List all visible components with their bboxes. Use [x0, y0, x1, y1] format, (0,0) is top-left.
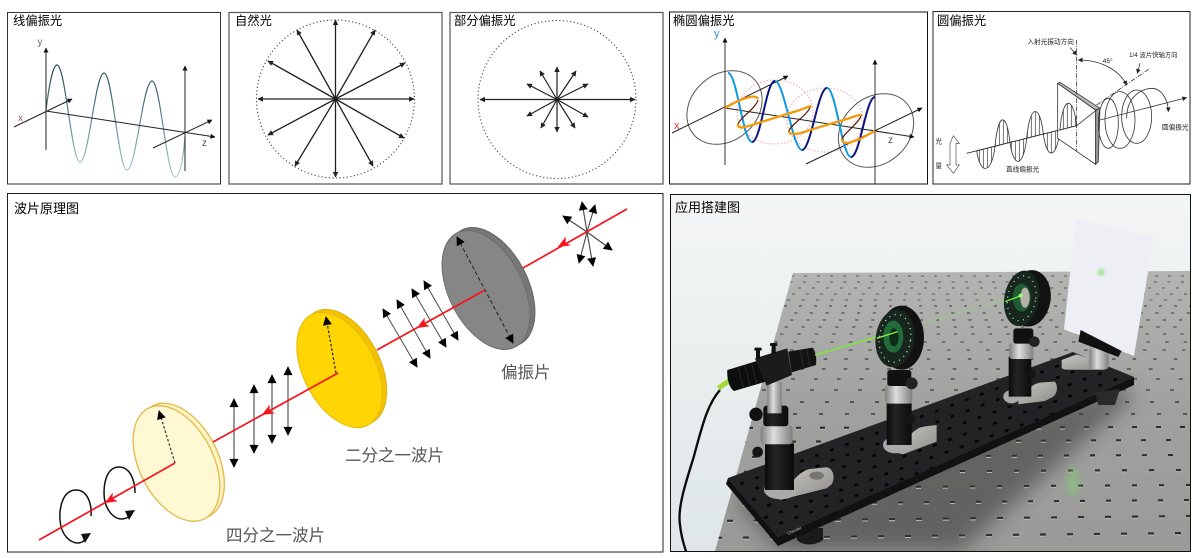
- optical table: [700, 271, 1190, 551]
- breadboard: [726, 352, 1136, 546]
- label: half-wave plate: 二分之一波片: [345, 446, 444, 465]
- lower table holes with soft rims: [700, 428, 1190, 538]
- polarizer mount 2: [1000, 267, 1057, 404]
- reflected green spot: [1066, 467, 1080, 497]
- title: partially polarized light: 部分偏振光: [454, 13, 516, 28]
- title: application setup: 应用搭建图: [675, 200, 740, 215]
- disc: quarter-wave plate: [115, 389, 242, 536]
- chart: sine wave with axes: y: [38, 37, 42, 48]
- chart: natural light vectors: [256, 20, 414, 178]
- polarizer mount 1: [872, 306, 937, 454]
- chart: quarter-wave plate schematic: 45°: [1103, 57, 1113, 65]
- chart: quarter-wave plate schematic: 1/4 波片快轴方向: [1129, 50, 1178, 59]
- label: polarizer: 偏振片: [501, 363, 550, 382]
- chart: elliptical helix: x: [674, 120, 680, 132]
- title: linear polarized light: 线偏振光: [13, 13, 62, 28]
- white screen and holder: [1062, 268, 1148, 405]
- chart: quarter-wave plate schematic: 入射光振动方向: [1027, 37, 1074, 46]
- chart: quarter-wave plate schematic: 圆偏振光: [1162, 122, 1189, 131]
- title: natural light: 自然光: [235, 13, 272, 28]
- incident unpolarized vectors: [563, 202, 612, 266]
- chart: quarter-wave plate schematic: [935, 37, 1189, 174]
- chart: quarter-wave plate schematic: 量: [935, 162, 942, 170]
- disc: half-wave plate: [279, 295, 404, 442]
- panel: partially polarized light: [450, 12, 663, 184]
- panel: elliptical polarized light: [670, 12, 929, 184]
- chart: sine wave with axes: z: [202, 138, 207, 149]
- linear vectors after polarizer: [383, 281, 458, 367]
- panel: natural light: [229, 12, 442, 184]
- disc: polarizer: [424, 213, 553, 364]
- chart: elliptical helix: y: [714, 28, 720, 40]
- chart: sine wave with axes: x: [18, 113, 23, 124]
- panel: linear polarized light: [8, 12, 220, 184]
- green laser beam: [814, 299, 1004, 356]
- circular polarization arrows: [60, 467, 135, 543]
- breadboard: Cheeder: [786, 525, 803, 536]
- title: waveplate principle: 波片原理图: [14, 201, 79, 216]
- chart: quarter-wave plate schematic: 光: [935, 137, 942, 146]
- panel: circular polarized light: [933, 12, 1190, 184]
- label: quarter-wave plate: 四分之一波片: [226, 526, 325, 545]
- title: elliptical polarized light: 椭圆偏振光: [673, 13, 734, 28]
- vertical vectors after half-wave plate: [234, 367, 288, 467]
- chart: sine wave with axes: [14, 37, 215, 177]
- chart: partial polarization vectors: [478, 20, 636, 178]
- red light beam: [39, 209, 627, 540]
- panel: waveplate principle diagram: [8, 194, 663, 552]
- chart: elliptical helix: z: [888, 135, 893, 146]
- fiber cable: [679, 390, 720, 553]
- title: circular polarized light: 圆偏振光: [937, 13, 986, 28]
- laser source on post: [679, 343, 834, 553]
- panel: application setup photo: [670, 194, 1190, 553]
- chart: elliptical helix: [672, 28, 929, 184]
- chart: quarter-wave plate schematic: 直线偏振光: [1006, 165, 1040, 174]
